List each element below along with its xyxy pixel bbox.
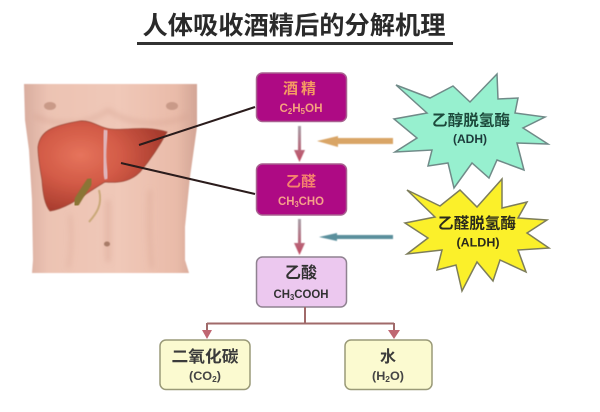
nipples and navel [44, 102, 178, 246]
box: acetic acid: CH [274, 287, 291, 301]
starburst: ALDH enzyme: (ALDH) [456, 236, 500, 250]
box: acetic acid: 3 [290, 293, 295, 302]
box: acetic acid: COOH [294, 287, 328, 301]
box: carbon dioxide: 2 [212, 375, 217, 384]
box: acetic acid [256, 257, 346, 307]
starburst: ADH enzyme: 乙醇脱氢酶 [432, 110, 510, 130]
pointer line to ethanol box [139, 107, 255, 145]
bile duct [89, 190, 100, 222]
box: ethanol: 酒精 [283, 80, 319, 98]
gallbladder [76, 181, 90, 203]
box: acetaldehyde: 3 [294, 200, 299, 209]
chest and abdomen shading [34, 110, 188, 268]
arrow: acetaldehyde to acetic acid [294, 219, 305, 255]
box: water: 2 [385, 375, 391, 384]
box: ethanol: 2 [288, 107, 293, 116]
starburst: ADH enzyme [394, 74, 548, 188]
starburst: ALDH enzyme: 乙醛脱氢酶 [438, 214, 516, 232]
box: ethanol: 5 [301, 107, 306, 116]
box: carbon dioxide: ) [217, 369, 221, 383]
box: carbon dioxide [160, 340, 250, 390]
title: 人体吸收酒精后的分解机理 [142, 12, 446, 40]
box: acetaldehyde: 乙醛 [286, 174, 316, 190]
branching arrows to products [202, 307, 400, 339]
box: carbon dioxide: 二氧化碳 [172, 347, 238, 366]
box: ethanol: H [292, 101, 301, 115]
pointer line to acetaldehyde box [121, 163, 255, 194]
box: water: 水 [380, 348, 396, 366]
arrow: ALDH catalysis [319, 233, 393, 241]
box: carbon dioxide: (CO [189, 369, 211, 383]
box: acetaldehyde: CH [278, 194, 295, 208]
box: acetic acid: 乙酸 [285, 263, 317, 282]
torso [24, 84, 197, 273]
box: water: (H [372, 369, 385, 383]
falciform ligament [104, 130, 107, 179]
box: water: O) [390, 369, 404, 383]
box: ethanol: C [280, 101, 288, 115]
title underline [137, 42, 453, 45]
arrow: ADH catalysis [317, 136, 393, 147]
illustration: torso with liver [24, 84, 197, 273]
liver [38, 121, 167, 211]
arrow: ethanol to acetaldehyde [294, 126, 305, 162]
box: acetaldehyde: CHO [299, 194, 324, 208]
box: water [345, 340, 432, 390]
starburst: ALDH enzyme [405, 179, 549, 291]
starburst: ADH enzyme: (ADH) [453, 132, 487, 146]
box: acetaldehyde [256, 164, 346, 215]
box: ethanol: OH [305, 101, 322, 115]
box: ethanol [256, 73, 346, 122]
